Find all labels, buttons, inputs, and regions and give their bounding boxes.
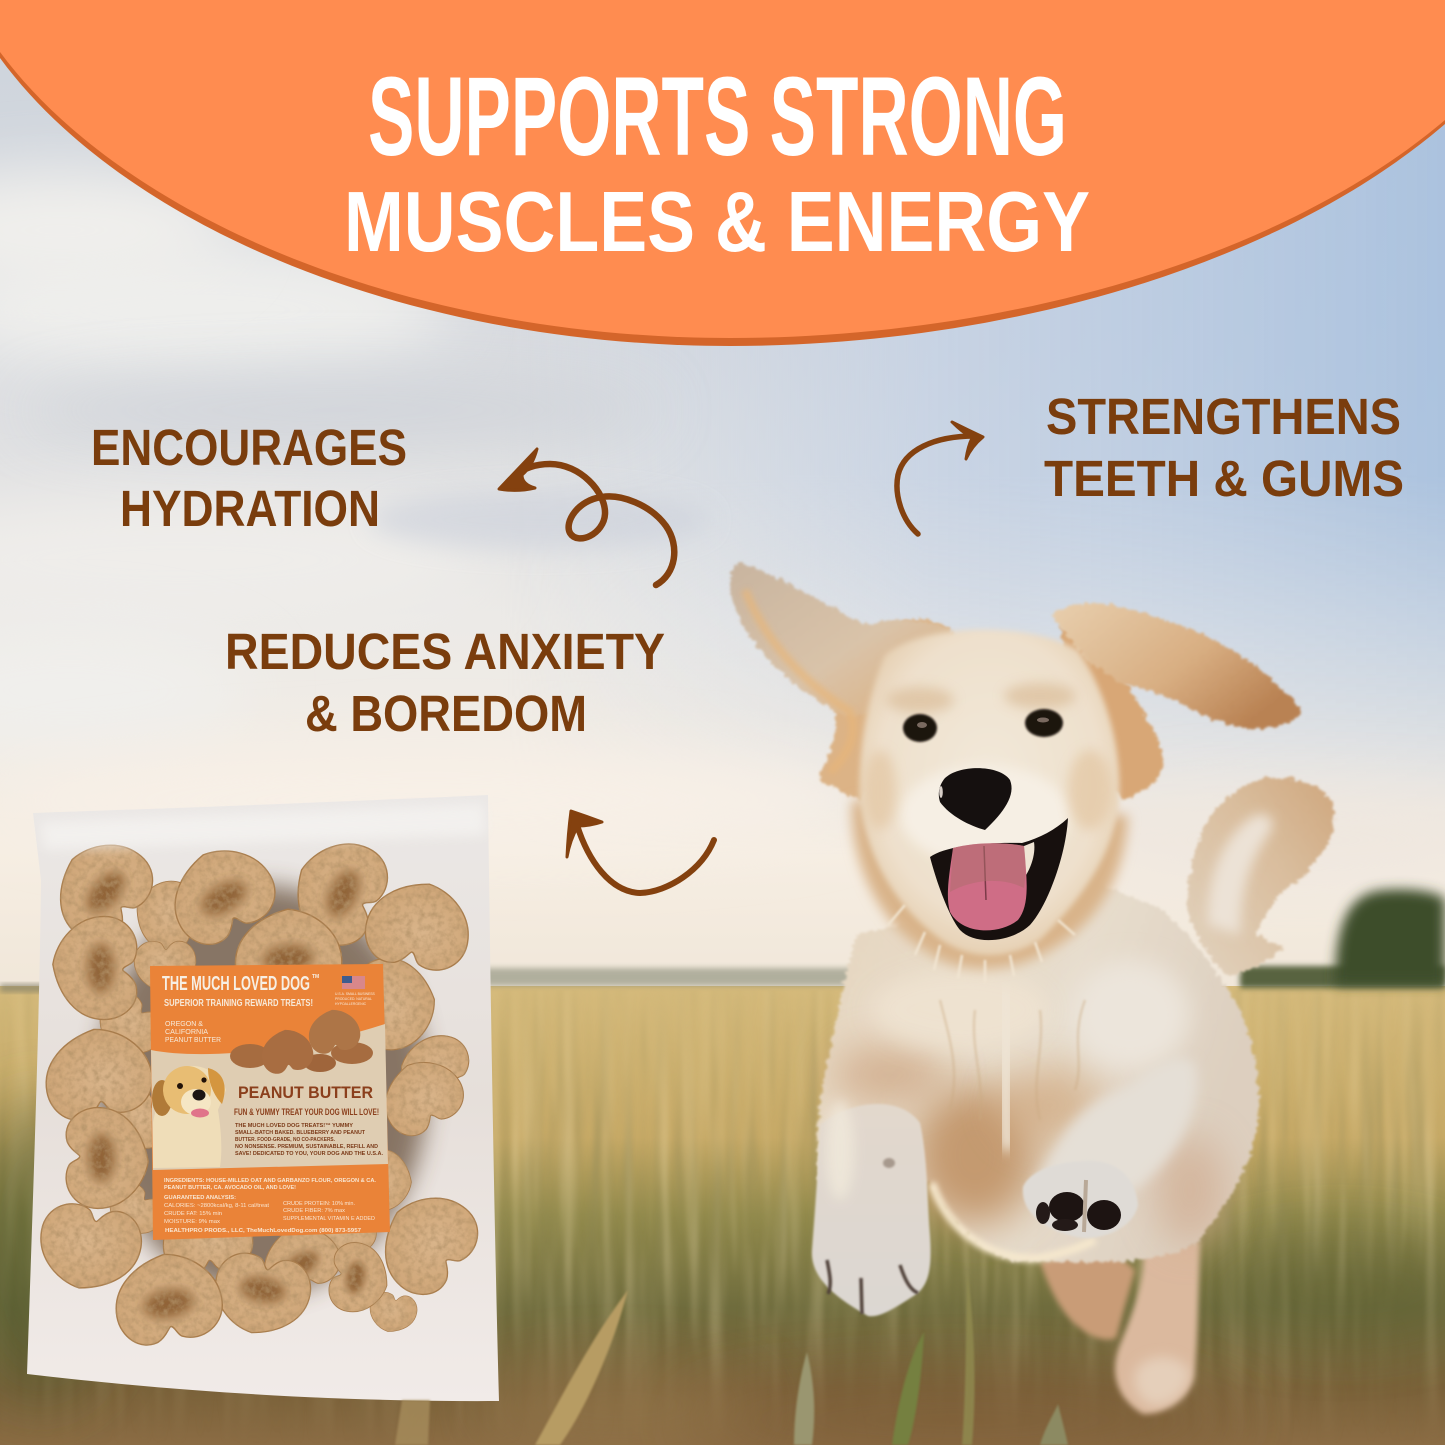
- label text: CRUDE FIBER: 7% max: [283, 1208, 345, 1214]
- label text: SUPPLEMENTAL VITAMIN E ADDED: [283, 1216, 375, 1222]
- banner: orange heading panel: [0, 0, 1445, 346]
- head: [860, 630, 1119, 982]
- arrow: curved arrow to reduces anxiety: [567, 811, 714, 893]
- far hind leg: [1040, 1240, 1135, 1340]
- label text: INGREDIENTS: HOUSE-MILLED OAT AND GARBANZO FLOUR, OREGON & CA.: [164, 1178, 376, 1184]
- label text: CRUDE PROTEIN: 10% min.: [283, 1201, 355, 1207]
- arrow: curved arrow to teeth and gums: [897, 422, 983, 534]
- callout: strengthens teeth and gums: TEETH & GUMS: [1044, 450, 1404, 507]
- front right leg: [1023, 1058, 1197, 1238]
- label text: PEANUT BUTTER, CA. AVOCADO OIL, AND LOVE!: [164, 1185, 296, 1191]
- label text: SUPERIOR TRAINING REWARD TREATS!: [164, 997, 313, 1009]
- callout: strengthens teeth and gums: STRENGTHENS: [1046, 388, 1401, 445]
- label text: CALIFORNIA: [165, 1029, 208, 1036]
- running puppy: [730, 563, 1334, 1414]
- orange ear ruff behind head: [818, 619, 955, 800]
- callout: encourages hydration: ENCOURAGES: [91, 419, 407, 476]
- label text: GUARANTEED ANALYSIS:: [164, 1195, 236, 1201]
- foreground grass blades: [395, 1270, 1068, 1445]
- tail: [1187, 777, 1334, 976]
- tongue: [948, 843, 1027, 930]
- callout: reduces anxiety and boredom: [225, 623, 665, 742]
- label text: MOISTURE: 9% max: [164, 1219, 220, 1225]
- label text: HEALTHPRO PRODS., LLC, TheMuchLovedDog.com (800) 873-5957: [165, 1228, 361, 1234]
- body: [817, 880, 1259, 1262]
- label text: OREGON &: [165, 1021, 203, 1028]
- label text: THE MUCH LOVED DOG: [162, 973, 310, 995]
- label text: SAVE! DEDICATED TO YOU, YOUR DOG AND THE U.S.A.: [235, 1151, 383, 1157]
- label text: CRUDE FAT: 15% min: [164, 1211, 222, 1217]
- plastic bag: [27, 795, 499, 1401]
- treats on label: [230, 1006, 373, 1076]
- mouth: [930, 818, 1068, 940]
- label text: SMALL-BATCH BAKED. BLUEBERRY AND PEANUT: [235, 1130, 366, 1136]
- paw with dark pads: [1023, 1161, 1138, 1238]
- plastic sheen: [40, 804, 486, 850]
- nose: [939, 768, 1012, 830]
- right ear: [1052, 603, 1302, 729]
- near hind leg: [1115, 1240, 1200, 1414]
- callout: encourages hydration: HYDRATION: [120, 480, 380, 537]
- flag icon: [335, 976, 376, 1006]
- puppy on label: [152, 1066, 226, 1168]
- chest fur shading: [832, 960, 1225, 1258]
- label text: TM: [312, 974, 319, 980]
- left ear: [730, 563, 952, 772]
- callout: strengthens teeth and gums: [1044, 388, 1404, 507]
- flag icon: U.S.A. SMALL BUSINESS: [335, 992, 376, 996]
- eyes: [903, 714, 937, 742]
- muzzle: [900, 765, 1070, 865]
- product bag of peanut butter treats: [27, 795, 499, 1401]
- title line 2: MUSCLES & ENERGY: [344, 175, 1090, 270]
- label text: PEANUT BUTTER: [165, 1037, 221, 1044]
- flag icon: HYPOALLERGENIC: [335, 1002, 367, 1006]
- callout: reduces anxiety and boredom: REDUCES ANXIETY: [225, 623, 665, 680]
- label text: [162, 973, 383, 1234]
- callout: encourages hydration: [91, 419, 407, 537]
- label text: PEANUT BUTTER: [238, 1083, 373, 1102]
- heart shaped treats: [33, 824, 490, 1350]
- neck ruff: [852, 800, 1128, 969]
- callout: reduces anxiety and boredom: & BOREDOM: [305, 685, 587, 742]
- label text: CALORIES: ~2800kcal/kg, 8-11 cal/treat: [164, 1203, 269, 1209]
- product label: [150, 964, 390, 1240]
- flag icon: PRODUCED. NATURAL: [335, 997, 372, 1001]
- front left leg: [812, 1100, 931, 1316]
- chin fur: [888, 905, 1075, 982]
- label text: FUN & YUMMY TREAT YOUR DOG WILL LOVE!: [234, 1107, 379, 1118]
- label text: THE MUCH LOVED DOG TREATS!™ YUMMY: [235, 1123, 353, 1129]
- label text: BUTTER. FOOD-GRADE, NO CO-PACKERS.: [235, 1137, 335, 1143]
- label text: NO NONSENSE. PREMIUM, SUSTAINABLE, REFILL AND: [235, 1144, 378, 1150]
- arrow: looped arrow to hydration: [499, 449, 674, 585]
